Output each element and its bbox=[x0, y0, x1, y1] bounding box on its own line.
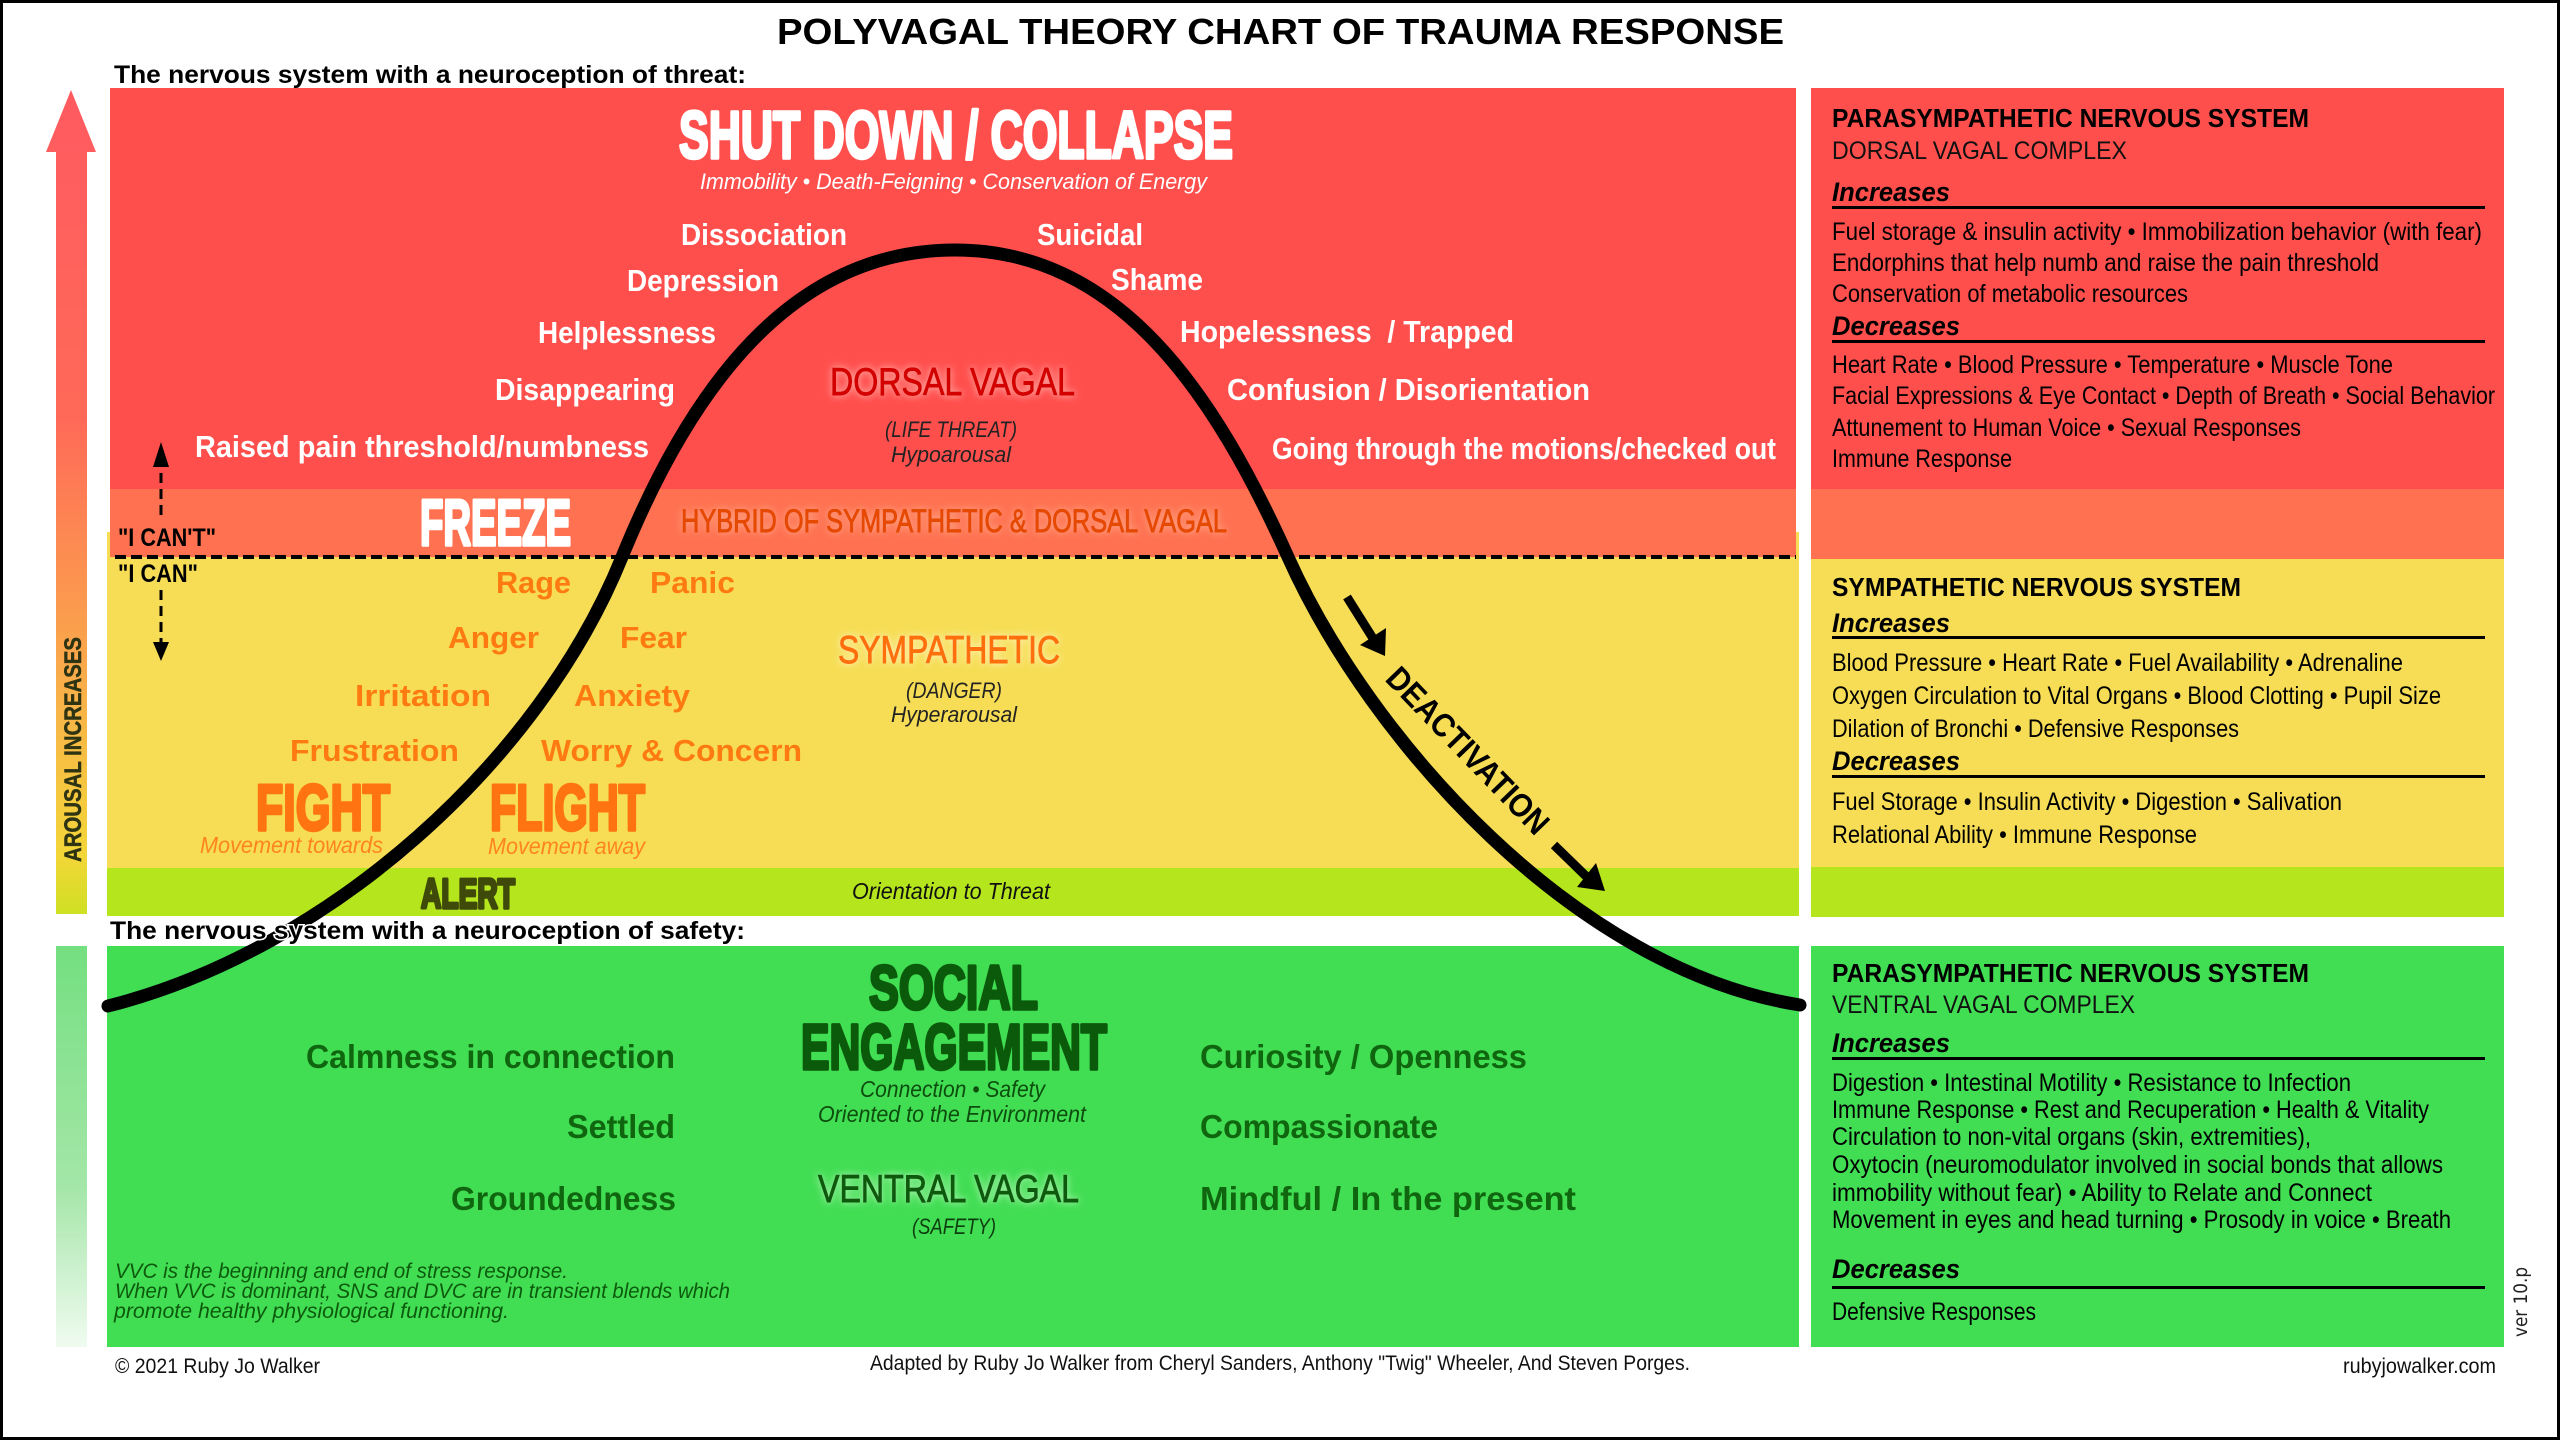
text panel: dorsal vagal complex bbox=[1832, 103, 2495, 473]
left symptoms: Disappearing bbox=[495, 372, 675, 407]
life threat note: (LIFE THREAT) bbox=[885, 417, 1017, 442]
flight side emotions: Anxiety bbox=[574, 678, 691, 713]
right symptoms: Hopelessness / Trapped bbox=[1180, 314, 1514, 349]
system heading: PARASYMPATHETIC NERVOUS SYSTEM bbox=[1832, 958, 2309, 988]
increases list bbox=[1832, 649, 2441, 743]
right qualities: Curiosity / Openness bbox=[1200, 1038, 1527, 1075]
ventral vagal label: VENTRAL VAGAL bbox=[818, 1168, 1079, 1211]
section: shut down bbox=[195, 98, 1776, 467]
increases list bbox=[1832, 1069, 2451, 1234]
increases list: Blood Pressure • Heart Rate • Fuel Availability • Adrenaline bbox=[1832, 649, 2403, 677]
hybrid label: HYBRID OF SYMPATHETIC & DORSAL VAGAL bbox=[681, 503, 1227, 539]
movement away: Movement away bbox=[488, 833, 646, 859]
increases list: Digestion • Intestinal Motility • Resistance to Infection bbox=[1832, 1069, 2351, 1097]
fight side emotions: Anger bbox=[448, 620, 539, 655]
increases list: Oxygen Circulation to Vital Organs • Blood Clotting • Pupil Size bbox=[1832, 682, 2441, 710]
flight heading: FLIGHT bbox=[490, 771, 645, 844]
increases list: Dilation of Bronchi • Defensive Responses bbox=[1832, 715, 2239, 743]
increases list: Immune Response • Rest and Recuperation • Health & Vitality bbox=[1832, 1096, 2429, 1124]
section: freeze bbox=[420, 486, 1227, 559]
fight side emotions: Irritation bbox=[355, 678, 491, 713]
system heading: PARASYMPATHETIC NERVOUS SYSTEM bbox=[1832, 103, 2309, 133]
panel: right side bands bbox=[1811, 88, 2504, 1347]
i can't marker bbox=[118, 442, 216, 552]
orientation subtitle: Oriented to the Environment bbox=[818, 1101, 1087, 1127]
increases list: Movement in eyes and head turning • Prosody in voice • Breath bbox=[1832, 1206, 2451, 1234]
dorsal vagal label: DORSAL VAGAL bbox=[830, 361, 1075, 404]
right symptoms: Shame bbox=[1111, 262, 1203, 297]
increases list: Oxytocin (neuromodulator involved in social bonds that allows bbox=[1832, 1151, 2443, 1179]
decreases heading: Decreases bbox=[1832, 746, 1960, 776]
panel: main chart bands bbox=[107, 88, 1799, 1347]
left symptoms: Depression bbox=[627, 263, 779, 298]
connection subtitle: Connection • Safety bbox=[860, 1076, 1046, 1102]
movement towards: Movement towards bbox=[200, 832, 383, 858]
increases list: Circulation to non-vital organs (skin, extremities), bbox=[1832, 1123, 2311, 1151]
down arrow bbox=[153, 590, 169, 661]
vvc note: promote healthy physiological functioning. bbox=[113, 1300, 509, 1323]
attribution: Adapted by Ruby Jo Walker from Cheryl Sanders, Anthony "Twig" Wheeler, And Steven Porges. bbox=[870, 1352, 1690, 1375]
heading: shut down / collapse: SHUT DOWN / COLLAPSE bbox=[679, 98, 1233, 173]
decreases list: Fuel Storage • Insulin Activity • Digestion • Salivation bbox=[1832, 788, 2342, 816]
arousal label: AROUSAL INCREASES bbox=[60, 637, 87, 862]
left qualities: Calmness in connection bbox=[306, 1038, 675, 1075]
complex subtitle: VENTRAL VAGAL COMPLEX bbox=[1832, 991, 2135, 1019]
right symptoms bbox=[1037, 217, 1776, 466]
orientation to threat: Orientation to Threat bbox=[852, 878, 1052, 904]
freeze heading: FREEZE bbox=[420, 486, 571, 559]
section: sympathetic bbox=[200, 565, 1060, 859]
hypoarousal note: Hypoarousal bbox=[891, 442, 1012, 467]
right qualities: Compassionate bbox=[1200, 1108, 1438, 1145]
vvc note bbox=[113, 1260, 730, 1323]
left qualities: Groundedness bbox=[451, 1180, 676, 1217]
hyperarousal note: Hyperarousal bbox=[891, 702, 1018, 727]
right qualities bbox=[1200, 1038, 1576, 1217]
left qualities bbox=[306, 1038, 676, 1217]
section: social engagement bbox=[113, 954, 1576, 1323]
left symptoms: Raised pain threshold/numbness bbox=[195, 429, 649, 464]
danger note: (DANGER) bbox=[906, 678, 1002, 703]
fight side emotions bbox=[290, 565, 571, 768]
arrow: lower bbox=[1554, 845, 1605, 891]
increases list bbox=[1832, 218, 2482, 308]
arrow: upper bbox=[1347, 597, 1386, 656]
threshold dashed line bbox=[115, 555, 1796, 559]
decreases list: Defensive Responses bbox=[1832, 1298, 2036, 1326]
left symptoms: Helplessness bbox=[538, 315, 716, 350]
i can't marker: "I CAN'T" bbox=[118, 524, 216, 552]
increases heading: Increases bbox=[1832, 1028, 1950, 1058]
right symptoms: Suicidal bbox=[1037, 217, 1143, 252]
heading: engagement: ENGAGEMENT bbox=[801, 1011, 1107, 1083]
decreases heading: Decreases bbox=[1832, 311, 1960, 341]
fight side emotions: Rage bbox=[496, 565, 571, 600]
fight side emotions: Frustration bbox=[290, 733, 459, 768]
right symptoms: Going through the motions/checked out bbox=[1272, 431, 1776, 466]
increases heading: Increases bbox=[1832, 177, 1950, 207]
vvc note: VVC is the beginning and end of stress response. bbox=[115, 1260, 568, 1283]
complex subtitle: DORSAL VAGAL COMPLEX bbox=[1832, 137, 2127, 165]
website: rubyjowalker.com bbox=[2343, 1355, 2496, 1378]
vvc note: When VVC is dominant, SNS and DVC are in transient blends which bbox=[115, 1280, 730, 1303]
version: ver 10.p bbox=[2510, 1267, 2532, 1337]
text panel: sympathetic nervous system bbox=[1832, 572, 2485, 849]
text panel: ventral vagal complex bbox=[1832, 958, 2485, 1326]
stress response curve bbox=[108, 250, 1800, 1006]
sympathetic label: SYMPATHETIC bbox=[838, 629, 1060, 672]
deactivation text: DEACTIVATION bbox=[1379, 659, 1557, 842]
decreases list bbox=[1832, 351, 2495, 473]
decreases list: Relational Ability • Immune Response bbox=[1832, 821, 2197, 849]
left symptoms bbox=[195, 217, 847, 464]
decreases list: Attunement to Human Voice • Sexual Responses bbox=[1832, 414, 2301, 442]
subtitle: Immobility • Death-Feigning • Conservation of Energy bbox=[700, 169, 1209, 194]
i can marker: "I CAN" bbox=[118, 560, 198, 588]
heading: social: SOCIAL bbox=[869, 954, 1038, 1023]
ventral gradient bar bbox=[56, 946, 87, 1347]
i can marker bbox=[118, 560, 198, 661]
title: POLYVAGAL THEORY CHART OF TRAUMA RESPONSE bbox=[777, 11, 1784, 52]
left symptoms: Dissociation bbox=[681, 217, 847, 252]
decreases list: Immune Response bbox=[1832, 445, 2012, 473]
threat heading: The nervous system with a neuroception of threat: bbox=[114, 61, 746, 89]
deactivation arrows and label bbox=[1347, 597, 1605, 891]
increases list: Endorphins that help numb and raise the pain threshold bbox=[1832, 249, 2379, 277]
decreases list bbox=[1832, 788, 2342, 849]
up arrow bbox=[153, 442, 169, 515]
flight side emotions: Panic bbox=[650, 565, 735, 600]
alert label: ALERT bbox=[421, 870, 515, 917]
right symptoms: Confusion / Disorientation bbox=[1227, 372, 1590, 407]
right qualities: Mindful / In the present bbox=[1200, 1180, 1576, 1217]
flight side emotions bbox=[541, 565, 802, 768]
increases heading: Increases bbox=[1832, 608, 1950, 638]
increases list: immobility without fear) • Ability to Relate and Connect bbox=[1832, 1179, 2372, 1207]
system heading: SYMPATHETIC NERVOUS SYSTEM bbox=[1832, 572, 2241, 602]
flight side emotions: Fear bbox=[620, 620, 687, 655]
copyright: © 2021 Ruby Jo Walker bbox=[115, 1355, 320, 1378]
decreases heading: Decreases bbox=[1832, 1254, 1960, 1284]
increases list: Fuel storage & insulin activity • Immobilization behavior (with fear) bbox=[1832, 218, 2482, 246]
safety heading: The nervous system with a neuroception of safety: bbox=[110, 917, 745, 945]
left qualities: Settled bbox=[567, 1108, 675, 1145]
safety note: (SAFETY) bbox=[912, 1214, 996, 1239]
decreases list: Heart Rate • Blood Pressure • Temperature • Muscle Tone bbox=[1832, 351, 2393, 379]
flight side emotions: Worry & Concern bbox=[541, 733, 802, 768]
increases list: Conservation of metabolic resources bbox=[1832, 280, 2188, 308]
fight heading: FIGHT bbox=[256, 771, 390, 844]
arousal gradient arrow bbox=[46, 90, 96, 914]
